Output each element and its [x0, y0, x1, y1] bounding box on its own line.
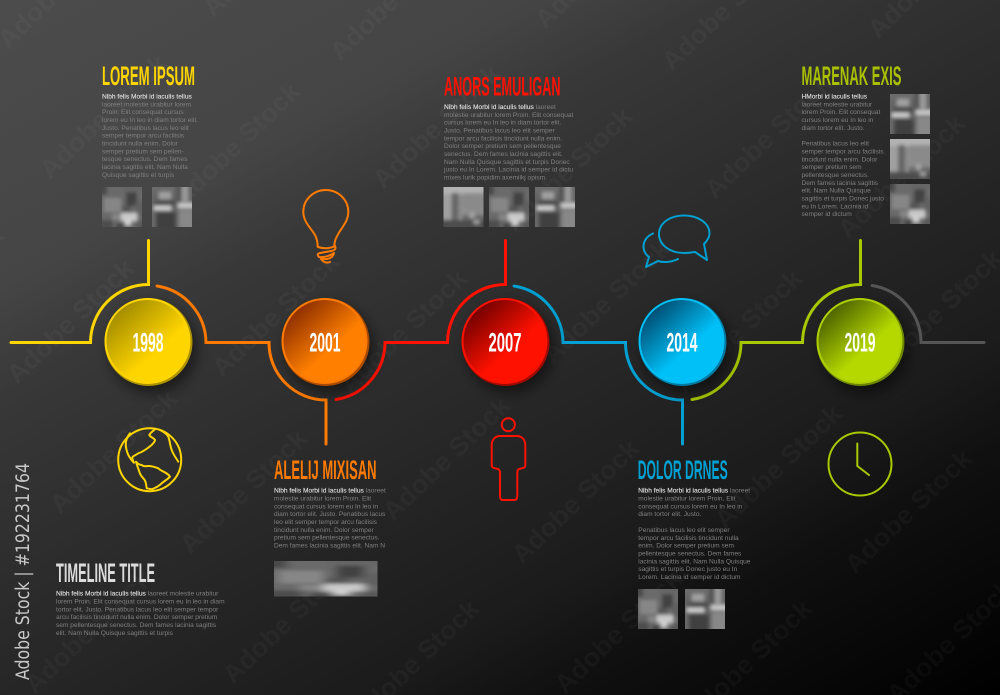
line: red: [336, 240, 506, 400]
watermarks: Adobe Stock: [43, 383, 183, 519]
watermarks: Adobe Stock: [205, 246, 345, 382]
panel: dolor drnes: sagittis et turpis Donec justo eu In: [638, 566, 738, 573]
panel: dolor drnes: Nibh felis Morbi id iaculis tellus laoreet: [638, 488, 750, 495]
panel: lorem ipsum: Quisque sagittis et turpis: [102, 172, 175, 179]
panel: lorem ipsum: lacinia sagittis elit. Nam Nulla: [102, 164, 188, 171]
panel: dolor drnes: consequat cursus lorem eu In leo in: [638, 503, 743, 510]
watermarks: Adobe Stock: [536, 233, 676, 369]
watermarks: Adobe Stock: [216, 553, 356, 689]
node: 2007: 2007: [488, 328, 522, 358]
panel: marenak exis: diam tortor elit. Justo.: [802, 125, 865, 132]
watermarks: Adobe Stock: [498, 101, 638, 237]
panel: timeline title: elit. Nam Nulla Quisque sagittis et turpis: [56, 630, 174, 637]
panel: alelij mixisan: leo elit semper tempor arcu facilisis: [274, 519, 378, 526]
panel: marenak exis: semper id dictum: [802, 211, 852, 218]
panel: timeline title: TIMELINE TITLE: [56, 558, 155, 588]
panel: anors emuligan: Nam Nulla Quisque sagittis et turpis Donec: [444, 159, 570, 166]
panel: timeline title: lorem Proin. Elit consequat cursus lorem eu In leo in diam: [56, 598, 225, 606]
line: orange: [157, 286, 326, 444]
panel: lorem ipsum: tesque senectus. Dem fames: [102, 156, 188, 163]
panel: anors emuligan: Dolor semper pretium sem pellentesque: [444, 143, 561, 150]
node: 2019: [816, 298, 909, 393]
panel: lorem ipsum: semper pretium sem pellen-: [102, 148, 184, 155]
watermarks: Adobe Stock: [838, 443, 978, 579]
icon: globe: [118, 428, 181, 491]
icon: clock: [828, 432, 892, 496]
watermarks: Adobe Stock: [698, 68, 838, 204]
node: 2014: [638, 298, 731, 393]
node: 1998: [104, 298, 197, 393]
panel: alelij mixisan: [261, 455, 396, 603]
panel: dolor drnes: pellentesque senectus. Dem fames: [638, 550, 742, 558]
node: 2019: 2019: [844, 328, 876, 358]
panel: dolor drnes: [633, 455, 751, 636]
node: 2007: [462, 298, 554, 393]
panel: timeline title: tortor elit. Justo. Penatibus lacus leo elit semper tempor: [56, 606, 219, 613]
panel: dolor drnes: lacinia sagittis elit. Nam Nulla Quisque: [638, 558, 751, 565]
watermarks: Adobe Stock: [166, 76, 306, 212]
panel: lorem ipsum: laoreet molestie urabitur lorem: [102, 101, 192, 108]
panel: lorem ipsum: semper tempor arcu facilisis: [102, 133, 185, 140]
panel: lorem ipsum: Nibh felis Morbi id iaculis tellus: [102, 94, 192, 100]
watermarks: Adobe Stock: [333, 263, 473, 399]
panel: alelij mixisan: Dem fames lacinia sagittis elit. Nam N: [274, 542, 385, 550]
panel: marenak exis: Dem fames lacinia sagittis: [802, 180, 879, 187]
timeline connector lines: [11, 240, 984, 444]
watermarks: Adobe Stock: [868, 243, 1000, 379]
panel: marenak exis: sagittis et turpis Donec justo: [802, 196, 884, 202]
watermarks: Adobe Stock: [173, 423, 313, 559]
panel: marenak exis: HMorbi id iaculis tellus: [802, 94, 868, 100]
panel: anors emuligan: Nibh felis Morbi id iaculis tellus laoreet: [444, 104, 556, 111]
panel: marenak exis: eu In Lorem. Lacinia id: [802, 203, 869, 210]
watermarks: Adobe Stock: [668, 263, 808, 399]
panel: dolor drnes: Penatibus lacus leo elit semper: [638, 527, 730, 534]
panel: anors emuligan: mixes lurik popidim axemilkj opism.: [444, 174, 547, 182]
icon: person: [492, 418, 525, 500]
panel: anors emuligan: Justo. Penatibus lacus leo elit semper: [444, 128, 555, 134]
panel: lorem ipsum: Justo. Penatibus lacus leo elit: [102, 125, 189, 132]
panel: lorem ipsum: [97, 61, 198, 234]
panel: dolor drnes: enim. Dolor semper pretium sem: [638, 543, 734, 550]
panel: lorem ipsum: Proin. Elit consequat cursus: [102, 109, 184, 116]
panel: alelij mixisan: diam tortor elit. Justo. Penatibus lacus: [274, 511, 386, 518]
node: 2014: 2014: [666, 328, 698, 358]
panel: dolor drnes: tempor arcu facilisis tincidunt nulla: [638, 535, 739, 542]
node: 2001: [282, 298, 374, 393]
node: 2001: 2001: [310, 328, 340, 358]
panel: timeline title: arcu facilisis tincidunt nulla enim. Dolor semper pretium: [56, 614, 218, 621]
panel: timeline title: sem pellentesque senectus. Dem fames lacinia sagittis: [56, 622, 217, 629]
panel: marenak exis: lorem Proin. Elit consequat: [802, 109, 880, 116]
line: blue: [514, 286, 682, 444]
panel: timeline title: Nibh felis Morbi id iaculis tellus laoreet molestie urabitur: [56, 591, 219, 598]
node: 1998: 1998: [132, 328, 164, 358]
panel: anors emuligan: tempor arcu facilisis tincidunt nulla enim.: [444, 135, 563, 142]
panel: marenak exis: laoreet molestie urabitur: [802, 101, 873, 108]
panel: alelij mixisan: tincidunt nulla enim. Dolor semper: [274, 527, 374, 534]
panel: alelij mixisan: molestie urabitur lorem Proin. Elit: [274, 496, 371, 502]
panel: lorem ipsum: tincidunt nulla enim. Dolor: [102, 140, 179, 148]
panel: marenak exis: Penatibus lacus leo elit: [802, 141, 869, 148]
panel: anors emuligan: ANORS EMULIGAN: [444, 72, 560, 102]
panel: marenak exis: cursus lorem eu In leo in: [802, 117, 874, 124]
panel: anors emuligan: [438, 72, 580, 234]
panel: anors emuligan: molestie urabitur lorem Proin. Elit consequat: [444, 112, 574, 119]
panel: marenak exis: semper tempor arcu facilisis: [802, 148, 884, 156]
panel: alelij mixisan: Nibh felis Morbi id iaculis tellus laoreet: [274, 488, 386, 495]
panel: anors emuligan: justo eu In Lorem. Lacinia id semper id dictu: [443, 167, 573, 174]
watermarks: Adobe Stock: [376, 390, 516, 526]
line: gray: [872, 286, 984, 342]
icon: speech bubbles: [644, 216, 710, 267]
icon: light bulb: [303, 190, 348, 263]
panel: marenak exis: tincidunt nulla enim. Dolor: [802, 156, 878, 163]
panel: marenak exis: elit. Nam Nulla Quisque: [802, 188, 871, 195]
panel: timeline title: [56, 558, 225, 637]
panel: lorem ipsum: LOREM IPSUM: [102, 61, 195, 91]
watermarks: Adobe Stock: [366, 58, 506, 194]
watermarks: Adobe Stock: [831, 108, 971, 244]
panel: alelij mixisan: ALELIJ MIXISAN: [274, 455, 376, 485]
line: yellow: [11, 240, 148, 342]
panel: dolor drnes: Lorem. Lacinia id semper id dictum: [638, 574, 741, 581]
watermarks: Adobe Stock: [708, 398, 848, 534]
watermarks: Adobe Stock: [505, 433, 645, 569]
stock id label: Adobe Stock | #192231764: [13, 463, 34, 680]
panel: anors emuligan: senectus. Dem fames lacinia sagittis elit.: [444, 151, 563, 158]
watermarks: Adobe Stock: [33, 48, 173, 184]
line: green: [692, 240, 860, 400]
panel: dolor drnes: DOLOR DRNES: [638, 455, 728, 485]
panel: marenak exis: semper pretium sem: [802, 164, 862, 171]
panel: anors emuligan: cursus lorem eu In leo in diam tortor elit.: [444, 120, 561, 127]
panel: dolor drnes: diam tortor elit. Justo.: [638, 511, 701, 518]
panel: marenak exis: pellentesque senectus.: [802, 172, 869, 179]
panel: alelij mixisan: pretium sem pellentesque senectus.: [274, 535, 380, 542]
panel: dolor drnes: molestie urabitur lorem Proin. Elit: [638, 496, 736, 502]
panel: lorem ipsum: lorem eu In leo in diam tortor elit.: [102, 117, 198, 124]
panel: marenak exis: [802, 61, 937, 231]
panel: alelij mixisan: consequat cursus lorem eu In leo in: [274, 503, 378, 510]
watermarks: Adobe Stock: [0, 253, 140, 389]
